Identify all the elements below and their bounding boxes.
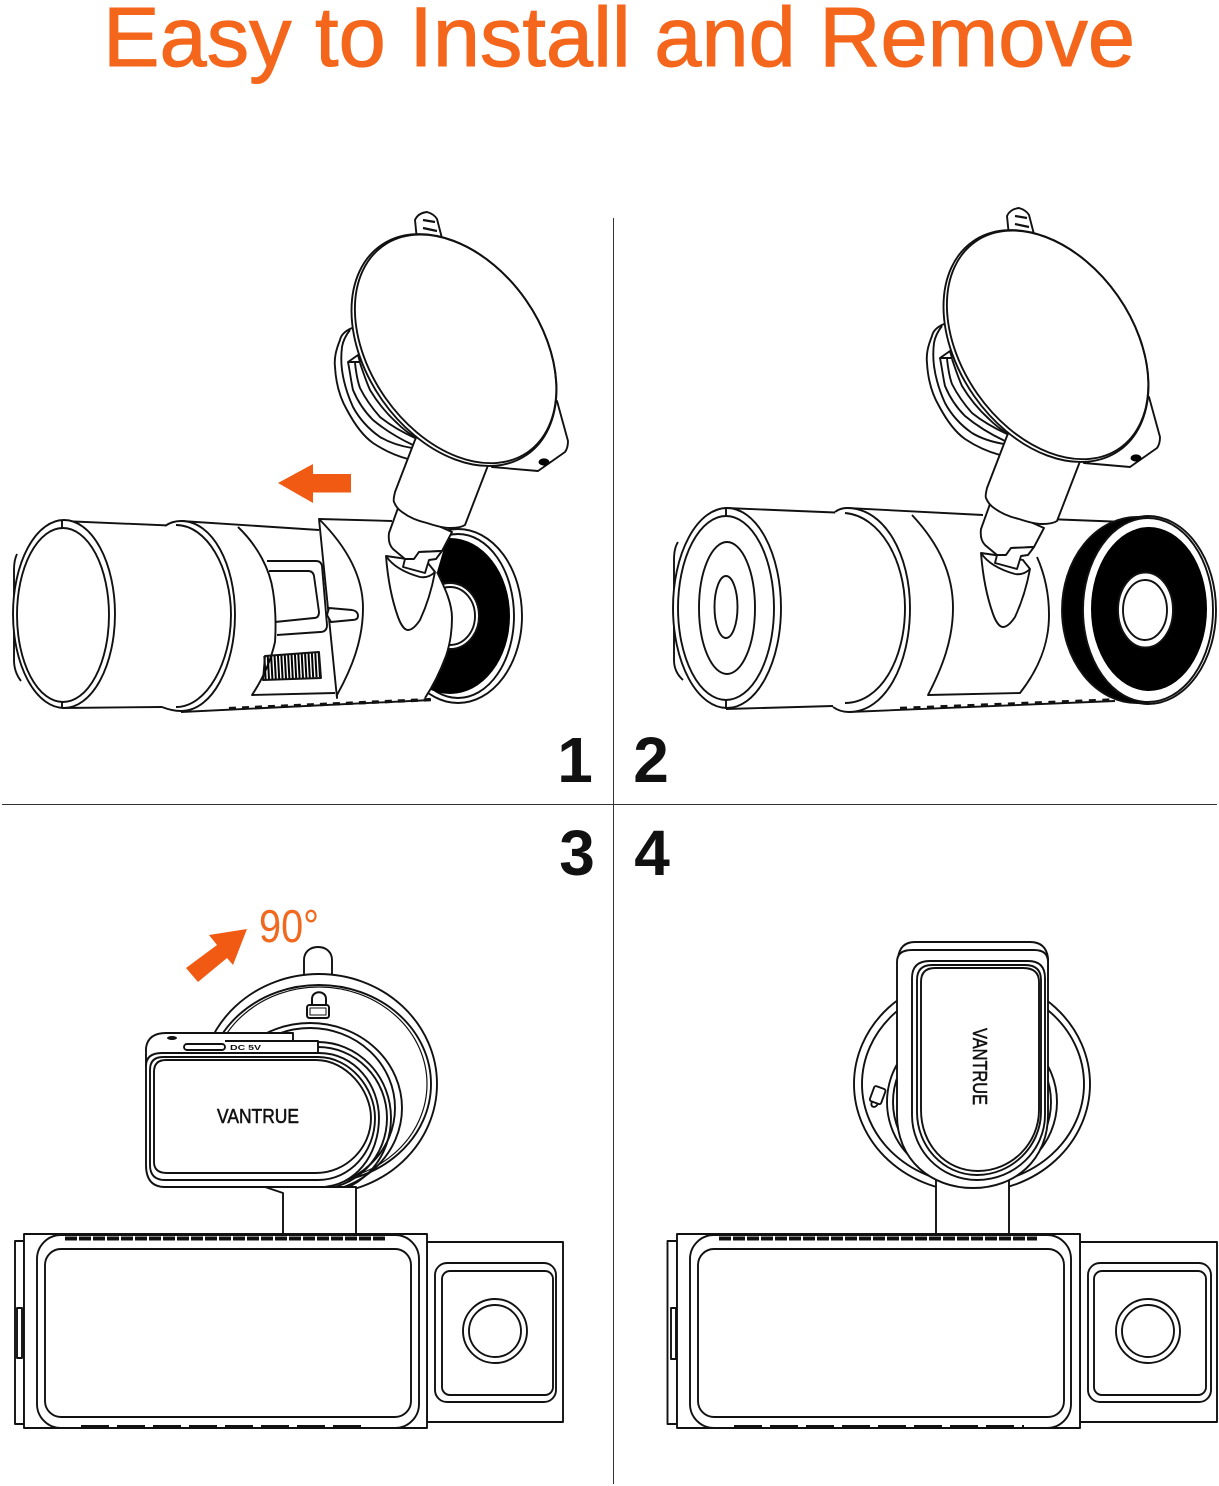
mount lower neck — [389, 508, 452, 573]
mount arm — [265, 1187, 356, 1235]
arrow: slide left — [278, 464, 351, 503]
suction disc — [309, 195, 599, 505]
camera body — [181, 519, 452, 712]
rotation label: 90° — [259, 900, 319, 952]
camera body — [847, 508, 1125, 712]
power label: DC 5V — [230, 1045, 261, 1052]
mount disc — [854, 976, 1090, 1192]
panel: step 2 — [633, 191, 1216, 796]
rear lens — [463, 1299, 527, 1363]
dashcam cover tube — [13, 520, 235, 711]
mount upper neck — [986, 426, 1087, 524]
suction disc — [901, 191, 1191, 501]
mount rings — [218, 1023, 402, 1194]
suction tab — [1007, 208, 1036, 242]
mount bracket — [492, 401, 568, 471]
lens end of camera — [390, 529, 522, 703]
step number 4: 4 — [634, 817, 670, 889]
camera back plate — [146, 1033, 379, 1187]
mount lower neck — [981, 504, 1044, 569]
dash camera — [15, 1234, 563, 1428]
camera back plate — [897, 942, 1048, 1188]
sliding camera sleeve — [319, 519, 363, 698]
panel: step 3 — [15, 817, 595, 1428]
suction mount — [309, 195, 599, 573]
mount disc — [201, 974, 437, 1194]
rear lens — [1116, 1299, 1180, 1363]
step number 1: 1 — [557, 724, 593, 796]
mount arm — [936, 1175, 1009, 1235]
icon: unlocked lock — [868, 1086, 886, 1109]
socket on camera — [386, 556, 435, 630]
socket on camera — [981, 553, 1030, 627]
dash camera — [668, 1234, 1217, 1428]
power slot — [184, 1044, 225, 1050]
mount upper neck — [394, 430, 495, 528]
mount rings — [927, 324, 1008, 455]
lens — [1062, 516, 1216, 704]
panel: step 1 — [13, 195, 599, 796]
step number 3: 3 — [559, 817, 595, 889]
arrow: rotate 90 degrees — [186, 929, 247, 982]
dashcam cover tube — [673, 507, 910, 712]
icon: lock — [307, 992, 329, 1018]
panel: step 4 — [634, 817, 1217, 1428]
suction tab — [415, 212, 444, 246]
step number 2: 2 — [633, 724, 669, 796]
suction mount — [901, 191, 1191, 569]
knurled dial — [263, 652, 321, 680]
suction tab — [304, 947, 332, 978]
mount rings — [335, 328, 416, 459]
mount bracket — [1084, 397, 1160, 467]
brand label: VANTRUE — [968, 1028, 990, 1105]
brand label: VANTRUE — [217, 1106, 299, 1128]
